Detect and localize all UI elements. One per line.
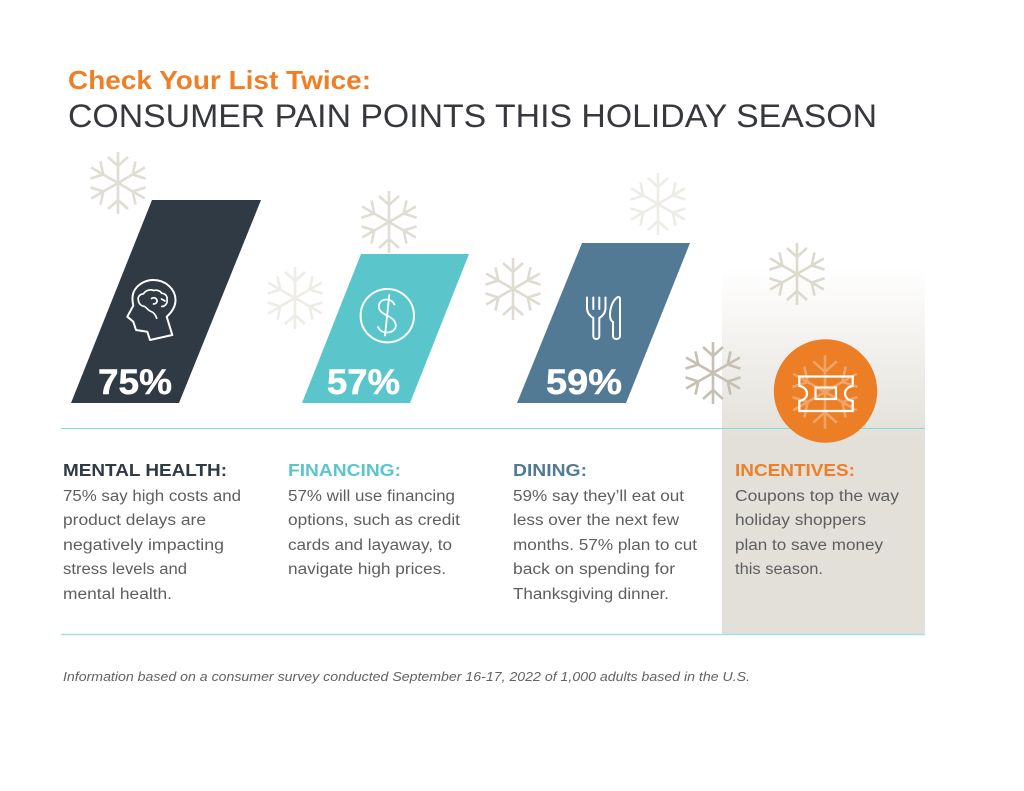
percentage: 75%: 75% [98, 363, 172, 402]
icon: snowflake 1 [86, 152, 150, 214]
body copy: plan to save money [735, 537, 883, 554]
text block: dining [513, 460, 698, 603]
text block: mental health [63, 460, 241, 603]
body copy: negatively impacting [63, 537, 224, 554]
badge circle [774, 339, 877, 443]
panel: mental health bar [71, 200, 261, 403]
bar shape [517, 243, 690, 403]
panel: dining bar [517, 243, 690, 403]
body copy: this season. [735, 561, 823, 578]
icon: snowflake 2 [357, 191, 421, 253]
icon: snowflake 3 [263, 267, 327, 329]
divider: lower line [61, 634, 925, 636]
heading: DINING: [513, 460, 587, 480]
title line: check your list twice: Check Your List Twice: [68, 65, 371, 95]
percentage: 57%: 57% [327, 363, 400, 402]
body copy [288, 488, 461, 578]
text block: incentives [735, 460, 899, 578]
footnote: Information based on a consumer survey conducted September 16-17, 2022 of 1,000 adults based in the U.S. [63, 669, 750, 684]
body copy: navigate high prices. [288, 561, 446, 578]
heading: MENTAL HEALTH: [63, 460, 227, 480]
body copy: holiday shoppers [735, 512, 866, 529]
icon: head with brain [127, 280, 176, 340]
heading: FINANCING: [288, 460, 401, 480]
heading: INCENTIVES: [735, 460, 855, 480]
icon: dollar coin [361, 289, 414, 342]
panel: incentives background [722, 268, 925, 634]
body copy: product delays are [63, 512, 206, 529]
body copy: less over the next few [513, 512, 680, 529]
percentage: 59%: 59% [546, 363, 622, 402]
text block: financing [288, 460, 461, 578]
divider: upper line [61, 428, 925, 430]
ticket outline [799, 376, 853, 411]
bar shape [71, 200, 261, 403]
body copy [735, 488, 899, 578]
body copy: 59% say they’ll eat out [513, 488, 685, 505]
icon: snowflake 6 [681, 342, 745, 404]
body copy [63, 488, 241, 603]
bar shape [302, 254, 469, 403]
snowflake in badge [787, 355, 863, 429]
body copy: Coupons top the way [735, 488, 899, 505]
icon: snowflake 4 [481, 258, 545, 320]
body copy: options, such as credit [288, 512, 461, 529]
title [68, 65, 877, 134]
body copy [513, 488, 698, 603]
body copy: Thanksgiving dinner. [513, 586, 669, 603]
body copy: 75% say high costs and [63, 488, 241, 505]
icon: snowflake 7 [765, 243, 829, 305]
title line: consumer pain points: CONSUMER PAIN POINTS THIS HOLIDAY SEASON [68, 98, 877, 134]
body copy: months. 57% plan to cut [513, 537, 698, 554]
body copy: 57% will use financing [288, 488, 455, 505]
body copy: stress levels and [63, 561, 187, 578]
icon: snowflake 5 [626, 173, 690, 235]
panel: financing bar [302, 254, 469, 403]
body copy: cards and layaway, to [288, 537, 452, 554]
icon: orange ticket badge [774, 339, 877, 443]
body copy: back on spending for [513, 561, 675, 578]
icon: fork and knife [587, 297, 620, 339]
body copy: mental health. [63, 586, 172, 603]
